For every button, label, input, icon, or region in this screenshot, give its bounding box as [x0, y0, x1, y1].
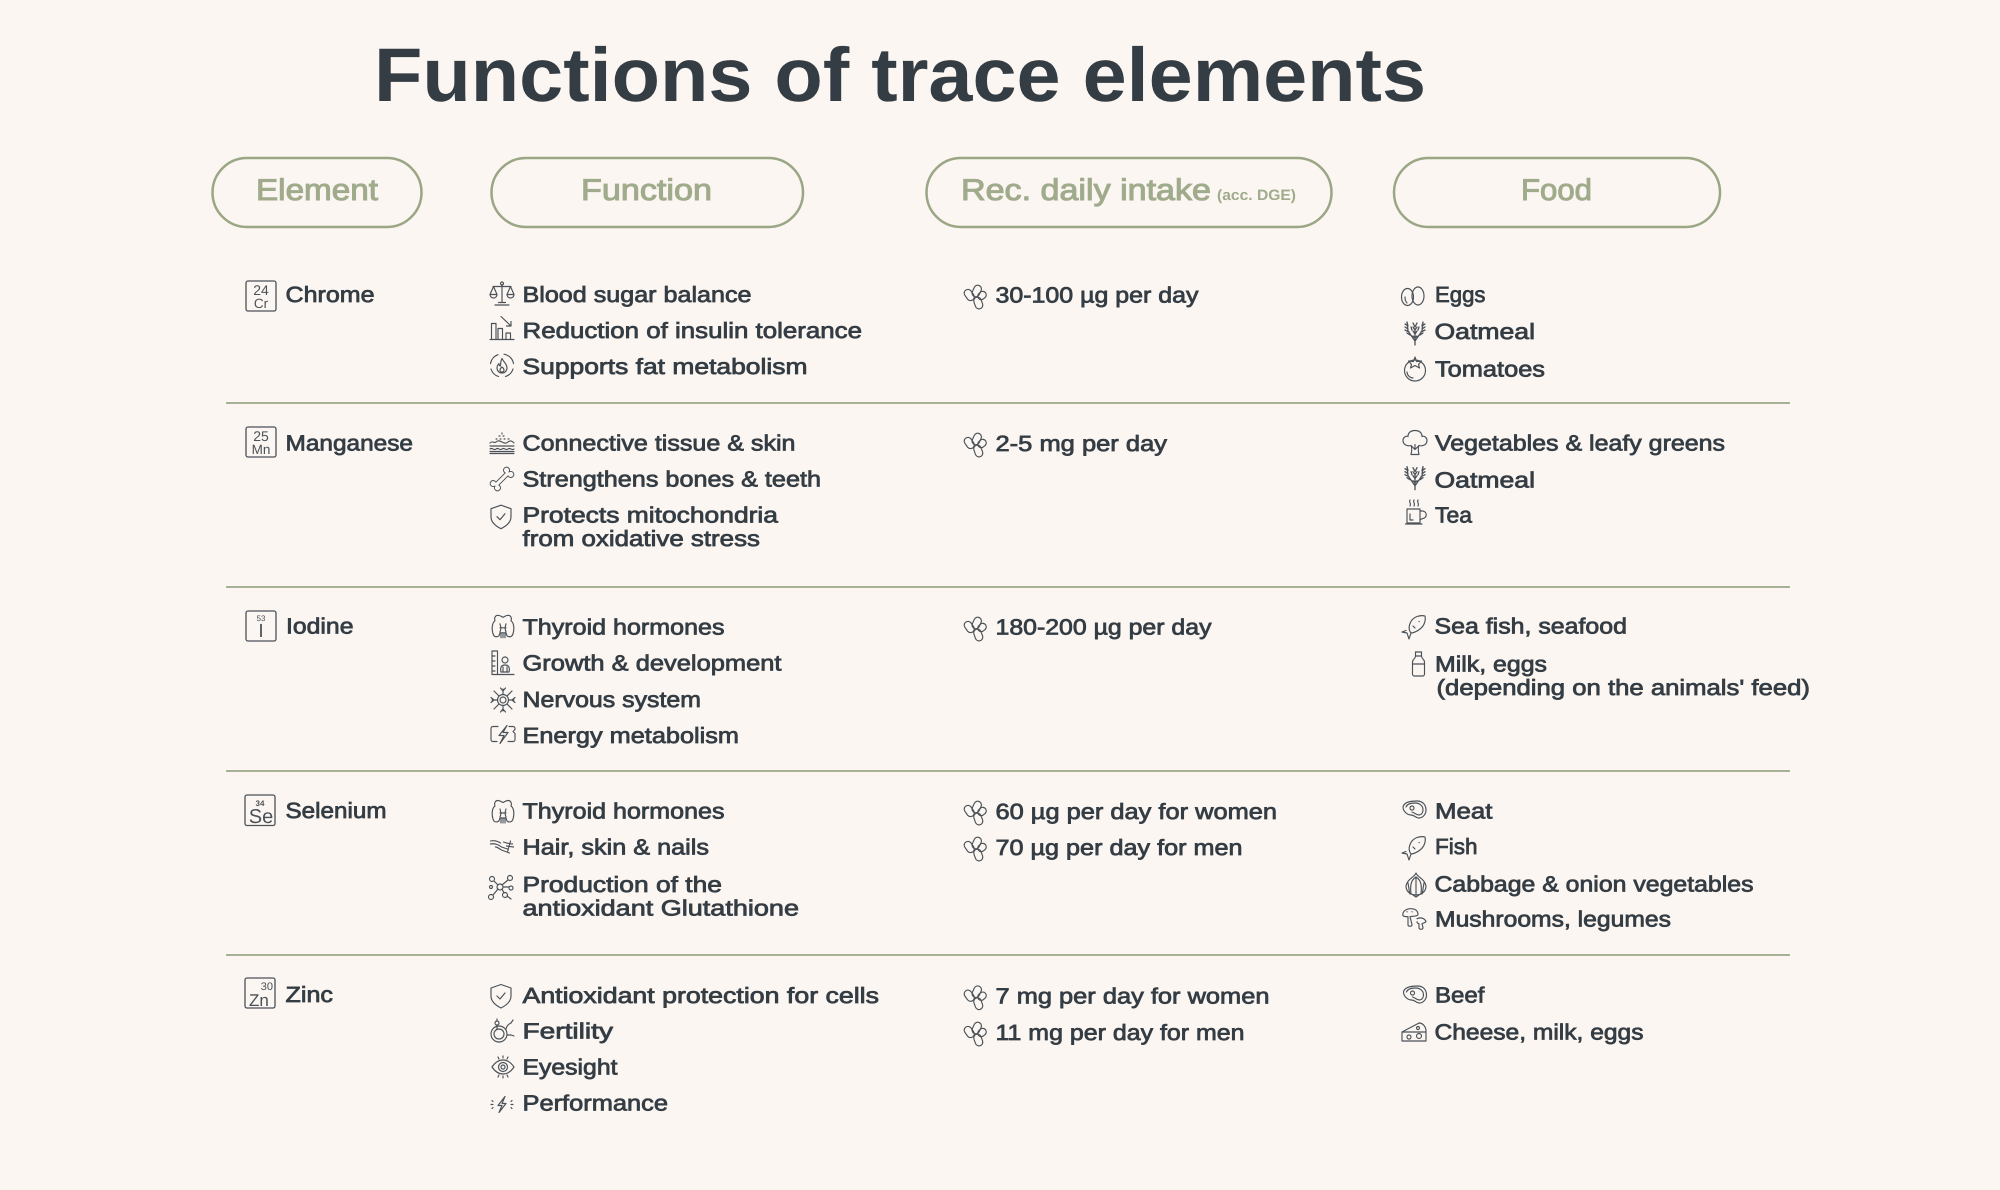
intake: 60 µg women: 60 µg per day for women	[996, 799, 1277, 824]
intake: 7 mg women: 7 mg per day for women	[996, 983, 1270, 1008]
intake: 70 µg men: 70 µg per day for men	[996, 835, 1242, 860]
intake: 2-5 mg	[963, 431, 1167, 458]
element: Manganese: 25	[253, 428, 269, 444]
function: blood sugar balance: Blood sugar balance	[522, 282, 752, 307]
function: protects mitochondria	[491, 502, 779, 551]
element: Iodine: I	[258, 621, 264, 642]
element: Zinc: 30	[261, 981, 273, 993]
function: production of antioxidant glutathione	[488, 872, 799, 920]
row: Iodine	[246, 611, 1810, 748]
function: production of antioxidant glutathione: antioxidant Glutathione	[522, 895, 799, 920]
function: eyesight	[492, 1055, 618, 1080]
food: oatmeal	[1405, 319, 1535, 345]
element: Chrome: Cr	[254, 296, 269, 311]
food: eggs	[1402, 282, 1486, 307]
food: oatmeal: Oatmeal	[1434, 468, 1535, 493]
element: Manganese	[246, 427, 413, 457]
element: Selenium	[245, 795, 386, 828]
intake: 2-5 mg: 2-5 mg per day	[996, 431, 1167, 456]
row: Zinc	[245, 978, 1644, 1116]
element: Chrome: 24	[253, 282, 269, 298]
element: Iodine: Iodine	[286, 614, 354, 639]
row: Manganese	[246, 427, 1725, 551]
food: tea: Tea	[1435, 502, 1473, 527]
function: thyroid hormones: Thyroid hormones	[522, 615, 724, 640]
food: cabbage and onion: Cabbage & onion vegetables	[1434, 872, 1754, 897]
food: tomatoes	[1404, 356, 1545, 381]
element: Chrome	[246, 281, 374, 311]
element: Chrome: Chrome	[286, 282, 374, 307]
row: Selenium	[245, 795, 1754, 932]
function: connective tissue and skin: Connective tissue & skin	[522, 431, 796, 456]
function: protects mitochondria: Protects mitochondria	[522, 502, 779, 527]
food: eggs: Eggs	[1435, 282, 1486, 307]
function: growth and development: Growth & development	[522, 651, 782, 676]
function: thyroid hormones: Thyroid hormones	[522, 799, 724, 824]
food: beef	[1404, 983, 1485, 1008]
food: milk, eggs: Milk, eggs	[1435, 652, 1547, 677]
function: performance: Performance	[522, 1091, 668, 1116]
header pill: Rec. daily intake	[926, 158, 1332, 227]
element: Iodine: 53	[257, 614, 266, 623]
food: meat	[1403, 798, 1492, 823]
function: eyesight: Eyesight	[522, 1055, 618, 1080]
function: antioxidant protection for cells: Antioxidant protection for cells	[522, 983, 879, 1008]
food: oatmeal: Oatmeal	[1434, 319, 1535, 344]
element: Zinc: Zn	[249, 991, 269, 1010]
food: fish: Fish	[1435, 834, 1478, 859]
intake: 30-100 µg	[963, 282, 1198, 310]
element: Zinc	[245, 978, 333, 1010]
function: nervous system: Nervous system	[522, 687, 701, 712]
function: reduction of insulin tolerance: Reduction of insulin tolerance	[522, 318, 862, 343]
header pill: Element	[212, 158, 422, 227]
row: Chrome	[246, 281, 1545, 381]
function: fertility: Fertility	[522, 1019, 613, 1044]
header pill: Food	[1394, 158, 1720, 227]
food: sea fish, seafood: Sea fish, seafood	[1434, 614, 1627, 639]
header pill: Rec. daily intake: (acc. DGE)	[1217, 187, 1296, 204]
header pill: Food: Food	[1521, 174, 1592, 207]
element: Selenium: Se	[249, 806, 273, 828]
header pill: Function	[492, 158, 803, 227]
food: beef: Beef	[1435, 983, 1485, 1008]
function: fertility	[491, 1019, 613, 1044]
food: vegetables and leafy greens: Vegetables & leafy greens	[1435, 431, 1725, 456]
element: Zinc: Zinc	[286, 982, 333, 1007]
food: oatmeal	[1405, 467, 1535, 493]
function: production of antioxidant glutathione: Production of the	[522, 872, 722, 897]
header pill: Rec. daily intake: Rec. daily intake	[961, 174, 1211, 207]
header pill: Element: Element	[256, 174, 379, 207]
function: supports fat metabolism: Supports fat metabolism	[522, 354, 808, 379]
title: Functions of trace elements	[374, 33, 1426, 118]
function: strengthens bones and teeth: Strengthens bones & teeth	[522, 467, 821, 492]
function: protects mitochondria: from oxidative stress	[522, 526, 760, 551]
element: Manganese: Mn	[252, 442, 270, 457]
food: mushrooms, legumes: Mushrooms, legumes	[1435, 907, 1671, 932]
element: Iodine	[246, 611, 354, 642]
function: energy metabolism: Energy metabolism	[522, 723, 739, 748]
header pill: Function: Function	[581, 174, 712, 207]
element: Selenium: 34	[256, 799, 265, 808]
element: Manganese: Manganese	[286, 430, 413, 456]
intake: 30-100 µg: 30-100 µg per day	[996, 282, 1198, 308]
food: fish	[1402, 834, 1478, 860]
food: meat: Meat	[1435, 798, 1492, 823]
food: milk, eggs: (depending on the animals' feed)	[1436, 675, 1810, 700]
function: hair, skin and nails: Hair, skin & nails	[522, 835, 709, 860]
food: cheese, milk, eggs: Cheese, milk, eggs	[1434, 1020, 1644, 1045]
intake: 180-200 µg: 180-200 µg per day	[996, 615, 1212, 640]
intake: 11 mg men: 11 mg per day for men	[996, 1020, 1244, 1045]
food: milk, eggs	[1412, 652, 1810, 700]
element: Selenium: Selenium	[286, 798, 386, 823]
food: tomatoes: Tomatoes	[1435, 356, 1545, 381]
food: tea	[1406, 500, 1473, 527]
